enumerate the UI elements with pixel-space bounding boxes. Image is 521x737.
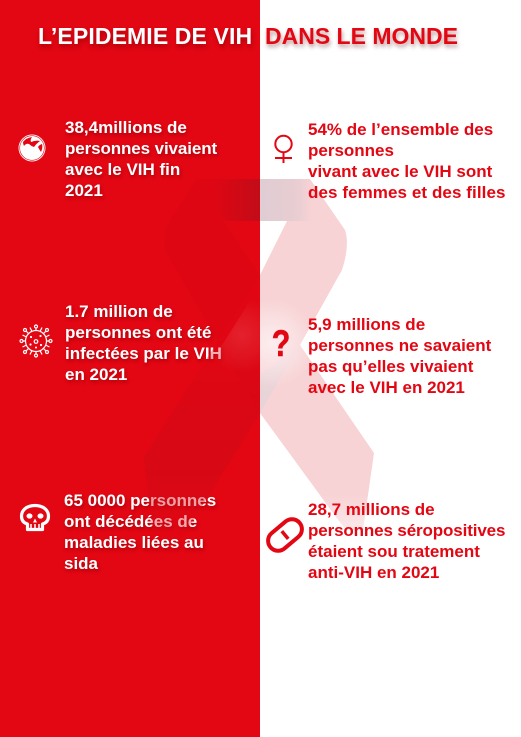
stat: people living with HIV: 2021: [65, 180, 103, 200]
stat: deaths: sida: [64, 554, 98, 572]
stat: new infections: [65, 302, 223, 384]
stat: unaware of status: pas qu’elles vivaient: [308, 356, 473, 376]
icon: skull: [20, 504, 50, 532]
icon: globe: [18, 134, 46, 162]
stat: unaware of status: personnes ne savaient: [308, 336, 491, 354]
icon: virus: [19, 324, 53, 358]
stat: unaware of status: [308, 314, 492, 396]
stat: women and girls: personnes: [308, 140, 394, 160]
icon: female symbol: [274, 134, 293, 163]
ribbon: translucent AIDS ribbon over both halves: [144, 179, 374, 530]
stat: deaths: ont décédées de: [64, 512, 197, 530]
stat: people living with HIV: 38,4millions de: [65, 118, 187, 136]
stat: women and girls: vivant avec le VIH sont: [308, 162, 492, 180]
right half of the ribbon: [260, 179, 374, 530]
stat: new infections: infectées par le VIH: [65, 344, 222, 362]
title: right part: DANS LE MONDE: [265, 23, 458, 49]
stat: deaths: [64, 490, 218, 572]
stat: unaware of status: 5,9 millions de: [308, 314, 425, 334]
stat: people living with HIV: avec le VIH fin: [65, 160, 180, 178]
stat: on treatment: étaient sou tratement: [308, 542, 480, 560]
stat: unaware of status: avec le VIH en 2021: [308, 378, 465, 396]
stat: on treatment: personnes séropositives: [308, 520, 505, 540]
stat: new infections: personnes ont été: [65, 322, 211, 342]
stat: on treatment: 28,7 millions de: [308, 500, 435, 518]
stat: people living with HIV: [65, 118, 218, 200]
stat: new infections: 1.7 million de: [65, 302, 173, 320]
stat: women and girls: des femmes et des filles: [308, 182, 506, 202]
stat: new infections: en 2021: [65, 364, 127, 384]
stat: on treatment: anti-VIH en 2021: [308, 562, 439, 582]
left half of the ribbon: [144, 179, 260, 537]
icon: question mark: ?: [272, 323, 290, 364]
stat: on treatment: [308, 500, 505, 582]
title: left part: L’EPIDEMIE DE VIH: [38, 23, 252, 49]
stat: women and girls: [308, 120, 506, 202]
stat: deaths: 65 0000 personnes: [64, 490, 216, 510]
stat: women and girls: 54% de l’ensemble des: [308, 120, 493, 138]
icon: pill: [266, 517, 304, 553]
stat: people living with HIV: personnes vivaient: [65, 138, 217, 158]
panel: red left half: [0, 0, 260, 737]
stat: deaths: maladies liées au: [64, 532, 204, 552]
